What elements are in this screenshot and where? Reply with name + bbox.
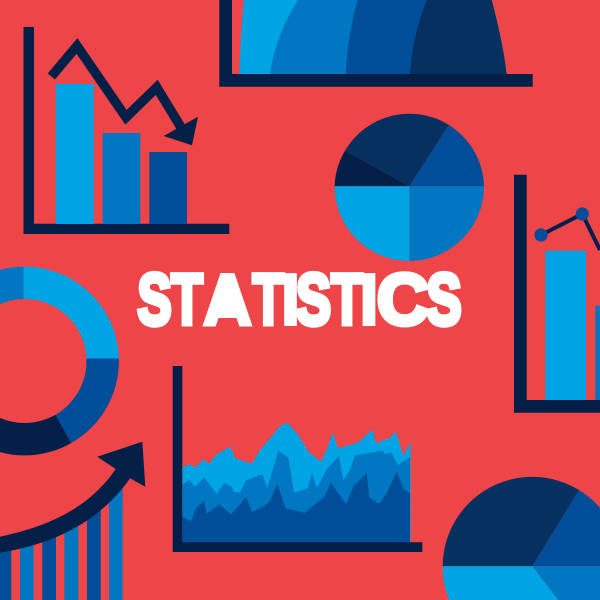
title: T	[252, 260, 284, 340]
slice: light blue	[335, 186, 409, 261]
title: S	[296, 260, 331, 340]
area layers	[182, 423, 411, 543]
dome bands	[235, 0, 512, 74]
axes	[219, 0, 533, 87]
slice: deep blue	[532, 490, 600, 566]
slice: navy	[443, 477, 579, 566]
title: A	[203, 260, 252, 340]
growth bars with arrow: bottom left	[0, 442, 145, 600]
arrow: downward trend	[51, 46, 198, 145]
slice: mid blue	[409, 186, 484, 261]
rising bars	[0, 485, 123, 600]
area chart: dome, top	[219, 0, 533, 87]
title: T	[171, 260, 203, 340]
pie chart: centre right	[335, 114, 484, 261]
segment: navy	[0, 414, 71, 456]
slice: darkest	[335, 151, 409, 186]
donut chart: left	[0, 266, 119, 456]
line with dots	[534, 207, 600, 250]
title: C	[377, 260, 429, 340]
title: T	[331, 260, 363, 340]
title: I	[360, 260, 378, 340]
slice: mid blue	[532, 566, 600, 600]
bar chart: falling bars with arrow	[24, 27, 229, 234]
slice: navy	[345, 114, 449, 186]
arrow: rising curve	[0, 442, 145, 553]
bars	[56, 84, 187, 224]
axes	[24, 27, 229, 234]
bar and line chart: right	[514, 175, 600, 413]
segment: deep blue	[55, 358, 119, 444]
pie chart: bottom right	[443, 477, 600, 600]
segment: mid blue	[0, 266, 24, 304]
title: I	[281, 260, 300, 340]
bars	[545, 251, 600, 401]
axes	[514, 175, 600, 413]
title: S	[426, 260, 462, 340]
axes	[173, 366, 422, 552]
slice: deep blue	[409, 125, 484, 186]
segment: light blue	[24, 266, 119, 358]
title: S	[138, 260, 172, 340]
slice: light blue	[443, 566, 558, 600]
area chart: bottom centre	[173, 366, 422, 552]
title	[138, 260, 462, 340]
